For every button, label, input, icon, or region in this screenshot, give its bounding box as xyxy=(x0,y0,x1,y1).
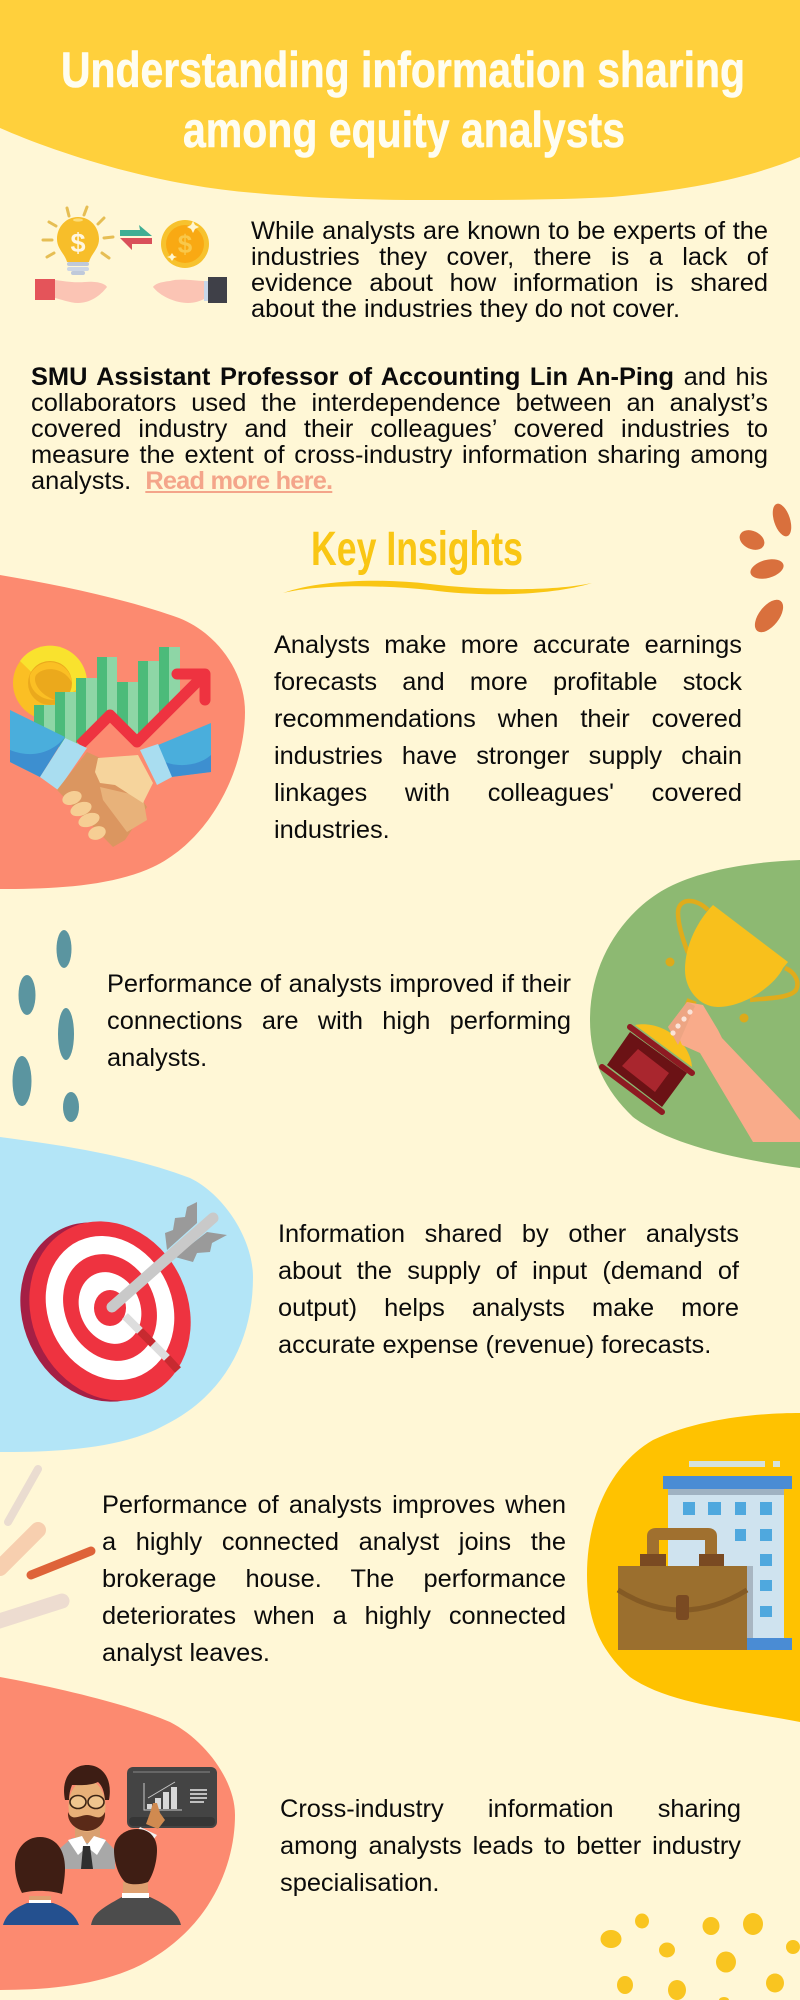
insight 1 text xyxy=(274,631,742,844)
intro paragraph: industries they cover, there is a lack of xyxy=(251,243,768,271)
intro paragraph: about the industries they do not cover. xyxy=(251,295,680,323)
study description paragraph: analysts. Read more here. xyxy=(31,467,332,495)
insight 1 text: linkages with colleagues' covered xyxy=(274,779,742,807)
insight 3 text: accurate expense (revenue) forecasts. xyxy=(278,1331,711,1359)
icon: lightbulb and coin exchange between hands: $ xyxy=(178,229,193,259)
header banner xyxy=(0,0,800,200)
insight 5 text: specialisation. xyxy=(280,1869,440,1897)
insight 4 text: deteriorates when a highly connected xyxy=(102,1602,566,1630)
insight 2 text: connections are with high performing xyxy=(107,1007,571,1035)
insight 5 text: Cross-industry information sharing xyxy=(280,1795,741,1823)
title xyxy=(61,42,745,158)
study description paragraph: covered industry and their colleagues’ covered industries to xyxy=(31,415,768,443)
intro paragraph: While analysts are known to be experts of the xyxy=(251,217,768,245)
blob: coral two xyxy=(0,1677,235,1990)
insight 1 text: industries have stronger supply chain xyxy=(274,742,742,770)
title: among equity analysts xyxy=(183,102,625,158)
blob: amber xyxy=(587,1413,800,1722)
insight 3 text xyxy=(278,1220,739,1359)
study description paragraph xyxy=(31,363,768,495)
insight 4 text: brokerage house. The performance xyxy=(102,1565,566,1593)
insight 5 text xyxy=(280,1795,741,1897)
insight 1 text: recommendations when their covered xyxy=(274,705,742,733)
insight 1 text: industries. xyxy=(274,816,390,844)
insight 1 text: Analysts make more accurate earnings xyxy=(274,631,742,659)
study description paragraph: SMU Assistant Professor of Accounting Lin An-Ping and his xyxy=(31,363,768,391)
insight 4 text: Performance of analysts improves when xyxy=(102,1491,566,1519)
heading: key insights: Key Insights xyxy=(311,523,523,576)
insight 5 text: among analysts leads to better industry xyxy=(280,1832,741,1860)
icon: office building with briefcase xyxy=(618,1461,792,1650)
decoration: yellow dots xyxy=(600,1913,800,2000)
insight 4 text xyxy=(102,1491,566,1667)
insight 2 text: analysts. xyxy=(107,1044,207,1072)
decoration: orange brush marks xyxy=(736,501,795,637)
icon: presenter and audience xyxy=(3,1765,217,1925)
icon: lightbulb and coin exchange between hands: $ xyxy=(70,228,86,258)
icon: target with arrow xyxy=(0,1195,227,1428)
heading underline swoosh xyxy=(283,581,592,594)
blob: coral one xyxy=(0,575,245,889)
insight 4 text: analyst leaves. xyxy=(102,1639,270,1667)
study description paragraph: collaborators used the interdependence between an analyst’s xyxy=(31,389,768,417)
insight 2 text: Performance of analysts improved if their xyxy=(107,970,571,998)
insight 3 text: about the supply of input (demand of xyxy=(278,1257,739,1285)
insight 2 text xyxy=(107,970,571,1072)
insight 3 text: Information shared by other analysts xyxy=(278,1220,739,1248)
insight 3 text: output) helps analysts make more xyxy=(278,1294,739,1322)
icon: trophy held in hand xyxy=(602,901,800,1142)
icon: lightbulb and coin exchange between hands xyxy=(35,207,227,303)
intro paragraph xyxy=(251,217,768,323)
blob: light blue xyxy=(0,1137,253,1452)
intro paragraph: evidence about how information is shared xyxy=(251,269,768,297)
study description paragraph: measure the extent of cross-industry information sharing among xyxy=(31,441,768,469)
decoration: pale and orange brush strokes xyxy=(0,1469,91,1622)
insight 1 text: forecasts and more profitable stock xyxy=(274,668,742,696)
text decoration: teal brush marks xyxy=(12,930,79,1122)
icon: handshake with growth chart xyxy=(10,646,215,847)
insight 4 text: a highly connected analyst joins the xyxy=(102,1528,566,1556)
blob: green xyxy=(590,860,800,1168)
